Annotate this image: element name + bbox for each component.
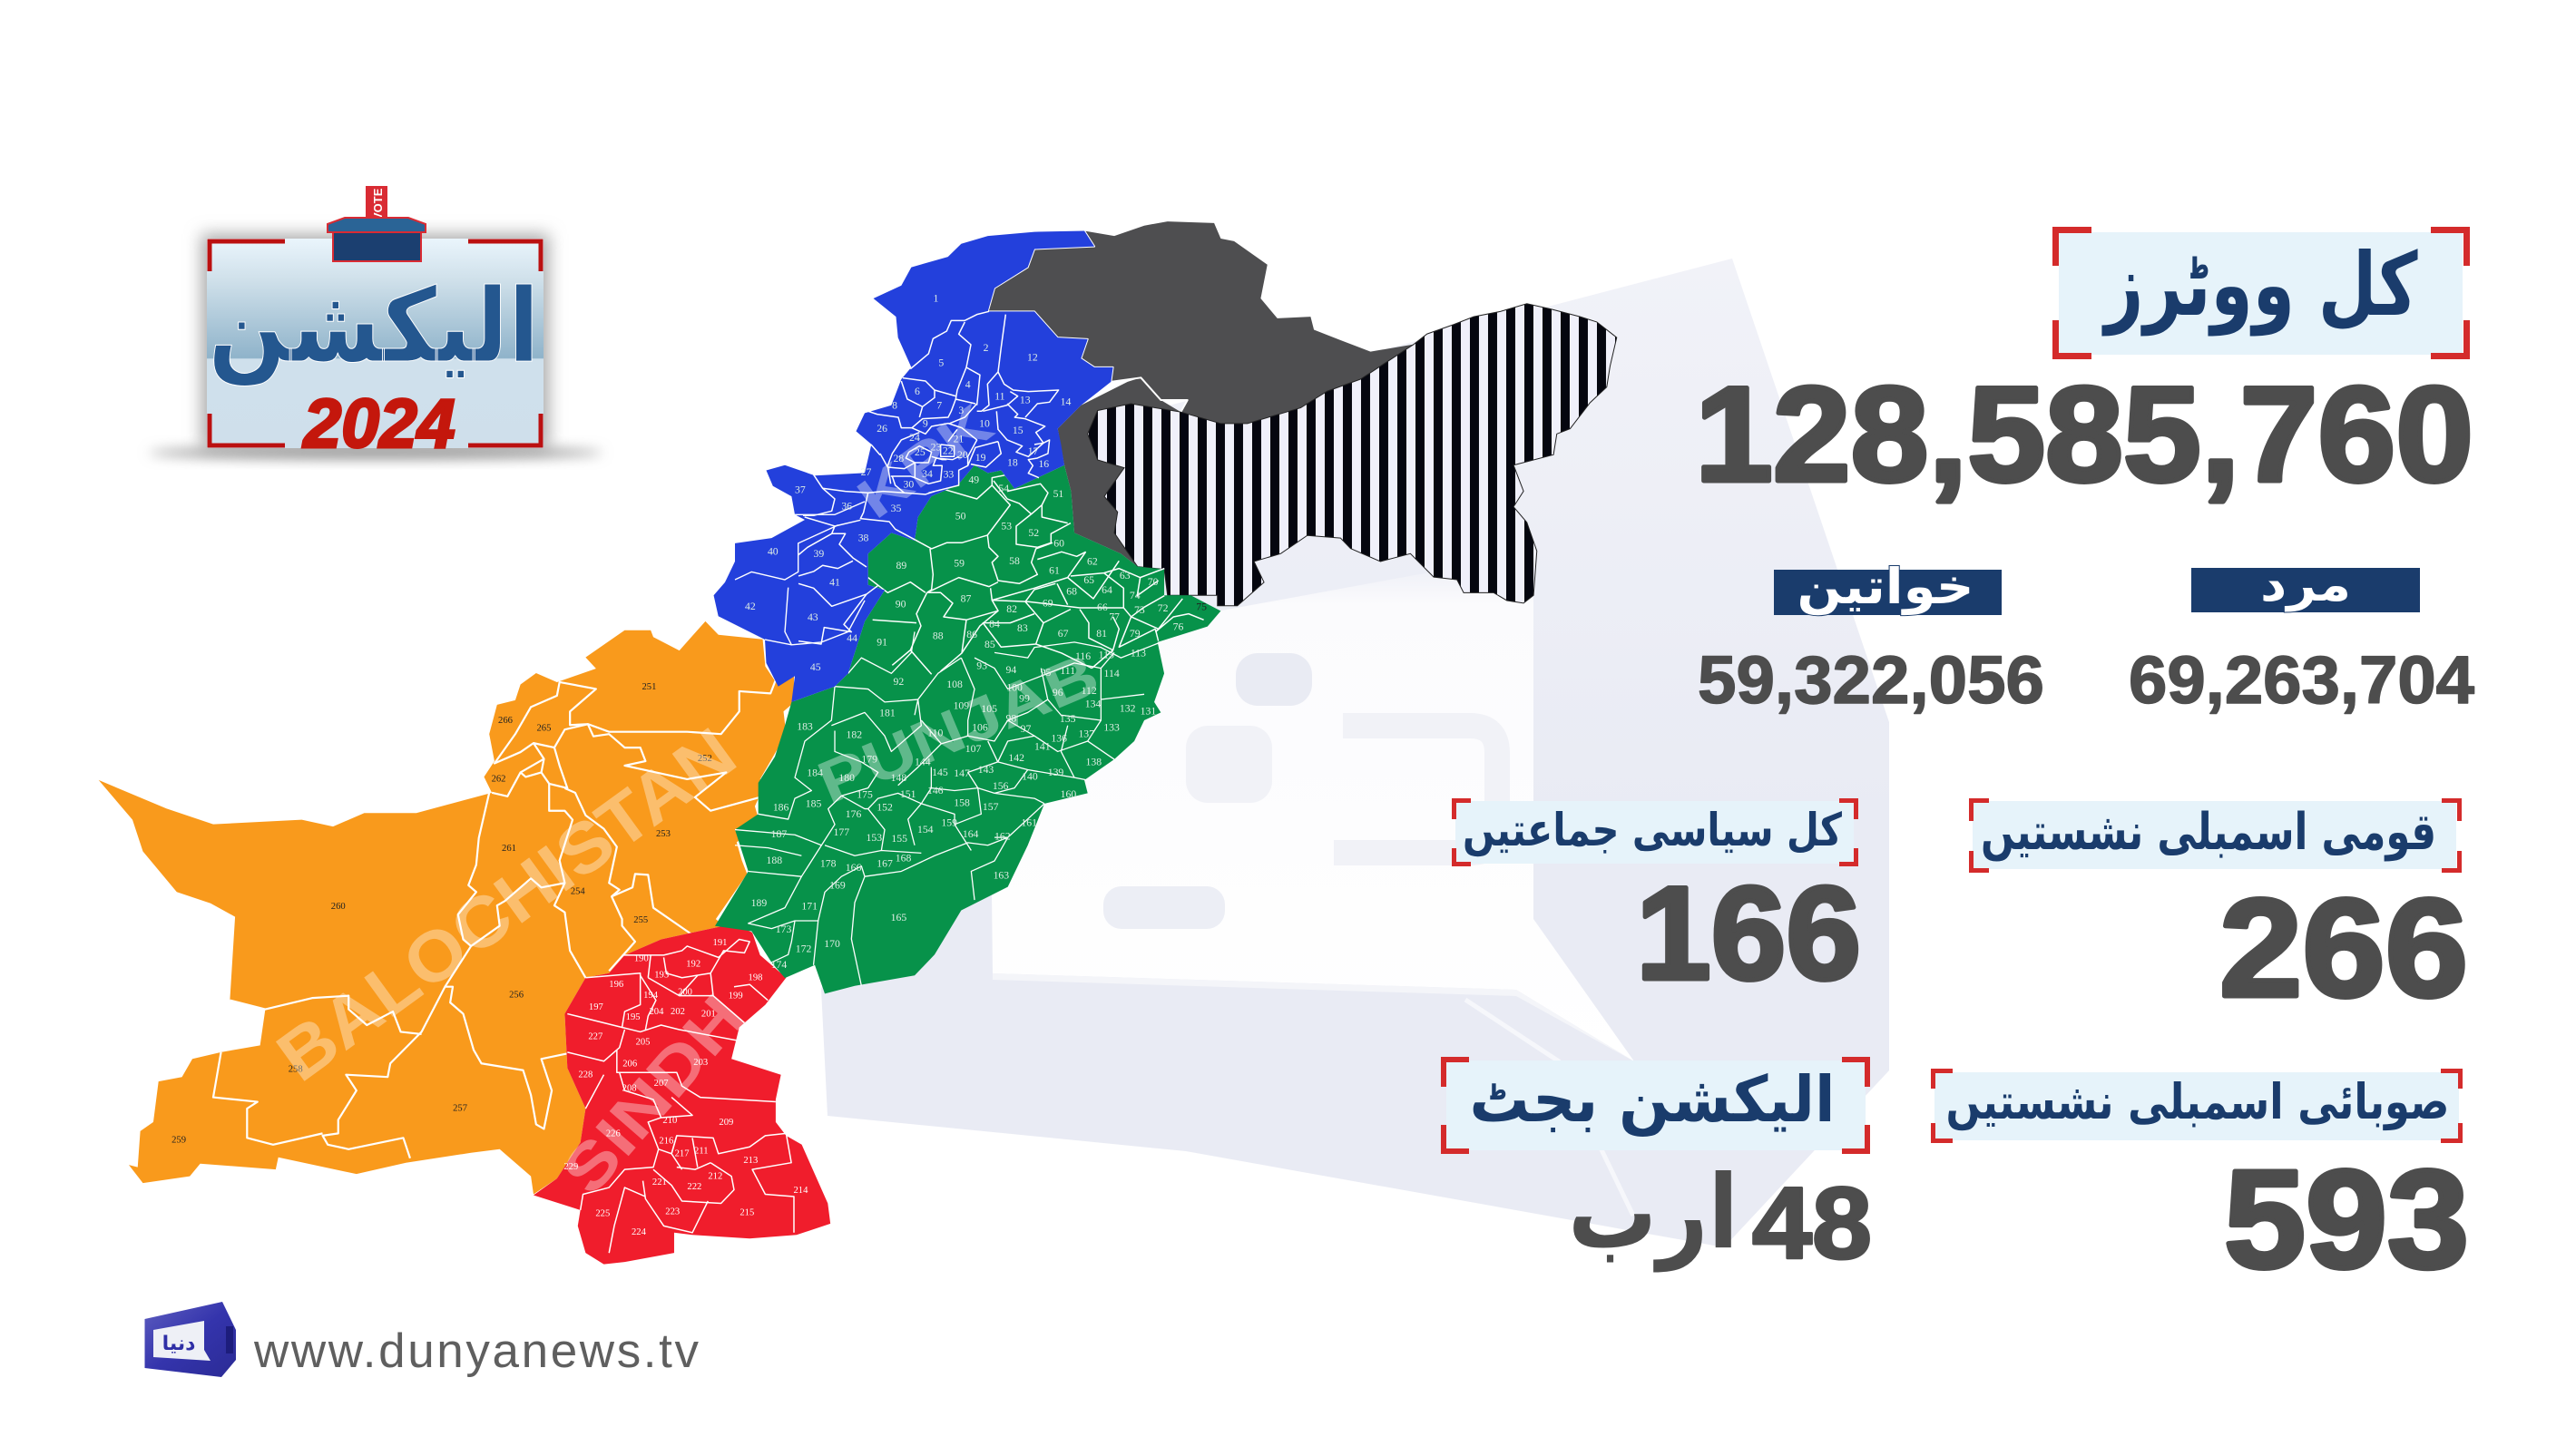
KPK constituency numbers: 7 bbox=[936, 399, 942, 411]
heading box: total voters bbox=[2056, 230, 2466, 356]
province label: KPK: KPK bbox=[847, 392, 1004, 531]
women label: خواتین bbox=[1797, 558, 1974, 615]
region: Sindh bbox=[534, 926, 830, 1265]
region: Gilgit-Baltistan and AJK bbox=[988, 221, 1414, 574]
KPK constituency numbers: 6 bbox=[915, 386, 920, 397]
map of Pakistan bbox=[99, 221, 1617, 1265]
stat: national assembly seats bbox=[1971, 800, 2468, 1026]
region: Sindh: 204 bbox=[649, 1007, 664, 1017]
Punjab constituency numbers: 170 bbox=[824, 938, 840, 950]
KPK constituency numbers: 2 bbox=[984, 342, 989, 354]
Punjab constituency numbers: 156 bbox=[993, 780, 1009, 792]
region: Sindh: 228 bbox=[578, 1070, 593, 1080]
Punjab constituency numbers: 153 bbox=[867, 832, 882, 844]
Punjab constituency numbers: 142 bbox=[1008, 752, 1024, 764]
icon: Dunya cube bbox=[145, 1302, 236, 1377]
KPK constituency numbers: 23 bbox=[931, 441, 941, 453]
Punjab constituency numbers: 59 bbox=[954, 557, 965, 569]
KPK constituency numbers: 38 bbox=[858, 533, 869, 544]
Punjab constituency numbers: 155 bbox=[891, 833, 907, 845]
region: Sindh: 199 bbox=[729, 991, 743, 1001]
logo year: 2024 bbox=[302, 386, 455, 463]
Punjab constituency numbers: 146 bbox=[927, 785, 944, 796]
Punjab constituency numbers: 86 bbox=[966, 629, 977, 640]
Punjab constituency numbers: 54 bbox=[998, 483, 1009, 494]
background watermark: Dunya logo bbox=[821, 259, 1889, 1247]
KPK constituency numbers: 35 bbox=[891, 503, 901, 514]
Punjab constituency numbers: 96 bbox=[1053, 687, 1063, 699]
Punjab constituency numbers: 76 bbox=[1173, 621, 1183, 632]
KPK constituency numbers: 15 bbox=[1013, 425, 1024, 436]
Punjab constituency numbers: 63 bbox=[1120, 570, 1131, 581]
Punjab constituency numbers: 180 bbox=[838, 772, 855, 784]
region: Balochistan: 261 bbox=[502, 844, 516, 854]
Punjab constituency numbers: 131 bbox=[1141, 705, 1156, 717]
region: Sindh: 203 bbox=[693, 1058, 708, 1068]
Punjab constituency numbers: 99 bbox=[1019, 693, 1030, 705]
stat: election budget: الیکشن بجٹ bbox=[1470, 1062, 1835, 1137]
Punjab constituency numbers: 173 bbox=[776, 923, 791, 935]
Punjab constituency numbers: 81 bbox=[1096, 628, 1107, 640]
logo heading: الیکشن bbox=[209, 268, 539, 386]
Punjab constituency numbers: 116 bbox=[1075, 650, 1091, 662]
Punjab constituency numbers: 158 bbox=[954, 796, 970, 808]
Punjab constituency numbers: 109 bbox=[954, 700, 969, 712]
KPK constituency numbers: 16 bbox=[1038, 458, 1049, 470]
Punjab constituency numbers: 160 bbox=[1061, 788, 1076, 800]
Punjab constituency numbers: 95 bbox=[1041, 667, 1052, 679]
Punjab constituency numbers: 175 bbox=[857, 789, 873, 801]
KPK constituency numbers: 34 bbox=[922, 468, 933, 480]
Punjab constituency numbers: 152 bbox=[877, 801, 893, 813]
Punjab constituency numbers: 147 bbox=[954, 767, 970, 779]
Punjab constituency numbers: 74 bbox=[1130, 590, 1141, 601]
region: Sindh: 221 bbox=[652, 1178, 667, 1187]
KPK constituency numbers: 19 bbox=[975, 452, 986, 464]
Punjab constituency numbers: 186 bbox=[773, 801, 789, 813]
Punjab constituency numbers: 154 bbox=[917, 824, 934, 835]
Punjab constituency numbers: 111 bbox=[1060, 665, 1075, 677]
region: Balochistan: 265 bbox=[537, 724, 551, 734]
Punjab constituency numbers: 64 bbox=[1102, 584, 1112, 596]
Punjab constituency numbers: 177 bbox=[834, 826, 849, 838]
region: Balochistan: 255 bbox=[633, 915, 648, 925]
Punjab constituency numbers: 113 bbox=[1131, 648, 1146, 660]
website url: www.dunyanews.tv bbox=[253, 1324, 699, 1378]
budget unit: ارب bbox=[1568, 1154, 1739, 1272]
region: Balochistan: 258 bbox=[289, 1065, 303, 1075]
KPK constituency numbers: 37 bbox=[795, 484, 806, 495]
Punjab constituency numbers: 145 bbox=[932, 767, 948, 778]
KPK constituency numbers: 41 bbox=[829, 577, 840, 589]
Punjab constituency numbers: 144 bbox=[915, 757, 931, 768]
region: Balochistan: 266 bbox=[498, 716, 513, 726]
region: Sindh: 191 bbox=[713, 938, 727, 948]
Punjab constituency numbers: 164 bbox=[963, 828, 979, 840]
Punjab constituency numbers: 91 bbox=[877, 637, 887, 649]
national assembly number: 266 bbox=[2219, 870, 2468, 1026]
KPK constituency numbers: 9 bbox=[923, 417, 928, 429]
region: Sindh: 198 bbox=[749, 973, 762, 983]
region: Balochistan: 257 bbox=[453, 1103, 467, 1113]
region: Punjab bbox=[715, 465, 1220, 993]
Punjab constituency numbers: 69 bbox=[1043, 597, 1053, 609]
Punjab constituency numbers: 83 bbox=[1017, 622, 1028, 634]
region: Sindh: 202 bbox=[671, 1007, 685, 1017]
footer: Dunya logo and website bbox=[145, 1302, 699, 1378]
Punjab constituency numbers: 87 bbox=[961, 592, 971, 604]
stat: political parties bbox=[1454, 800, 1861, 1007]
Punjab constituency numbers: 184 bbox=[807, 767, 823, 779]
Punjab constituency numbers: 132 bbox=[1120, 702, 1136, 714]
KPK constituency numbers: 40 bbox=[768, 546, 779, 558]
region: Sindh: 217 bbox=[675, 1149, 690, 1159]
KPK constituency numbers: 28 bbox=[894, 453, 904, 464]
Punjab constituency numbers: 82 bbox=[1006, 603, 1017, 615]
stat: political parties: کل سیاسی جماعتیں bbox=[1463, 804, 1843, 857]
region: Sindh: 213 bbox=[743, 1156, 758, 1166]
Punjab south district lines bbox=[735, 631, 1161, 986]
Punjab constituency numbers: 53 bbox=[1001, 521, 1012, 533]
Punjab constituency numbers: 141 bbox=[1034, 740, 1051, 752]
province label: Sindh: SINDH bbox=[548, 981, 759, 1207]
region: Sindh: 216 bbox=[659, 1137, 673, 1147]
Punjab constituency numbers: 75 bbox=[1196, 601, 1207, 612]
region: Balochistan: 259 bbox=[171, 1136, 186, 1146]
KPK constituency numbers: 36 bbox=[841, 501, 852, 513]
region: Sindh: 223 bbox=[665, 1207, 680, 1217]
region: Sindh: 206 bbox=[622, 1060, 637, 1070]
region: Sindh: 215 bbox=[739, 1208, 754, 1218]
Punjab constituency numbers: 88 bbox=[933, 630, 944, 642]
region: Sindh: 225 bbox=[595, 1209, 610, 1219]
Punjab constituency numbers: 60 bbox=[1053, 537, 1064, 549]
KPK constituency numbers: 22 bbox=[943, 445, 954, 456]
KPK constituency numbers bbox=[745, 293, 1072, 673]
KPK constituency numbers: 24 bbox=[909, 432, 920, 444]
Punjab constituency numbers: 114 bbox=[1104, 668, 1120, 679]
Punjab constituency numbers: 85 bbox=[984, 639, 995, 650]
total voters panel bbox=[1695, 230, 2474, 718]
men label: مرد bbox=[2260, 558, 2351, 612]
Punjab constituency numbers: 183 bbox=[797, 721, 813, 733]
Punjab constituency numbers: 188 bbox=[766, 855, 782, 866]
KPK constituency numbers: 33 bbox=[944, 469, 954, 481]
region: Sindh: 222 bbox=[687, 1182, 701, 1192]
Punjab constituency numbers: 89 bbox=[896, 560, 906, 572]
region: Sindh: 195 bbox=[626, 1012, 641, 1022]
Punjab constituency numbers: 169 bbox=[829, 880, 846, 892]
Punjab constituency numbers: 70 bbox=[1148, 576, 1159, 588]
Punjab constituency numbers: 94 bbox=[1006, 664, 1016, 676]
region: Sindh: 224 bbox=[632, 1227, 647, 1237]
Punjab constituency numbers: 166 bbox=[846, 862, 861, 874]
KPK constituency numbers: 5 bbox=[938, 357, 944, 368]
KPK constituency numbers: 45 bbox=[810, 661, 821, 673]
KPK constituency numbers: 18 bbox=[1007, 457, 1018, 469]
election 2024 logo bbox=[149, 186, 602, 463]
KPK constituency numbers: 43 bbox=[808, 611, 818, 623]
region: Balochistan: 252 bbox=[698, 754, 712, 764]
Punjab constituency numbers: 179 bbox=[861, 754, 877, 766]
region: Balochistan: 254 bbox=[571, 887, 585, 897]
KPK constituency numbers: 26 bbox=[877, 423, 887, 435]
KPK constituency numbers: 12 bbox=[1027, 352, 1038, 364]
region: Sindh: 190 bbox=[634, 954, 649, 964]
Punjab constituency numbers: 108 bbox=[946, 679, 963, 690]
KPK constituency numbers: 17 bbox=[1028, 445, 1039, 457]
Punjab constituency numbers: 157 bbox=[983, 801, 999, 813]
Punjab constituency numbers: 143 bbox=[978, 764, 994, 776]
Punjab constituency numbers: 133 bbox=[1103, 722, 1120, 734]
Punjab constituency numbers: 138 bbox=[1086, 757, 1102, 768]
Punjab constituency numbers: 140 bbox=[1022, 771, 1038, 783]
budget number: 48 bbox=[1752, 1167, 1872, 1280]
Punjab constituency numbers: 106 bbox=[972, 722, 988, 734]
region: Sindh: 200 bbox=[678, 988, 692, 998]
Punjab constituency numbers: 174 bbox=[771, 959, 787, 971]
Punjab constituency numbers: 107 bbox=[965, 743, 981, 755]
Punjab constituency numbers: 148 bbox=[891, 772, 906, 784]
KPK constituency numbers: 44 bbox=[847, 632, 857, 644]
region: Sindh: 207 bbox=[654, 1079, 669, 1089]
region: Sindh: 208 bbox=[622, 1083, 637, 1093]
Punjab constituency numbers: 182 bbox=[847, 729, 862, 741]
KPK constituency numbers: 39 bbox=[814, 548, 824, 560]
region: Sindh: 193 bbox=[654, 971, 669, 981]
parties number: 166 bbox=[1636, 859, 1861, 1007]
KPK constituency numbers: 3 bbox=[958, 405, 964, 416]
region: Sindh: 201 bbox=[701, 1009, 716, 1019]
KPK constituency numbers: 27 bbox=[861, 466, 871, 478]
Punjab constituency numbers: 90 bbox=[896, 599, 906, 611]
region: Balochistan bbox=[99, 621, 794, 1195]
Punjab constituency numbers: 73 bbox=[1134, 604, 1145, 616]
region: KPK bbox=[714, 230, 1113, 702]
Punjab constituency numbers: 112 bbox=[1082, 685, 1097, 697]
Punjab constituency numbers: 165 bbox=[891, 912, 906, 923]
Punjab constituency numbers: 68 bbox=[1066, 585, 1077, 597]
province label: Punjab: PUNJAB bbox=[808, 640, 1108, 816]
region: Balochistan: 253 bbox=[656, 829, 671, 839]
Punjab constituency numbers: 176 bbox=[846, 808, 861, 820]
Punjab constituency numbers: 84 bbox=[989, 618, 1000, 630]
men number: 69,263,704 bbox=[2129, 642, 2474, 718]
KPK district lines bbox=[798, 311, 1059, 644]
region: Sindh: 197 bbox=[589, 1002, 603, 1012]
stat: provincial assembly seats bbox=[1933, 1070, 2469, 1297]
Punjab constituency numbers: 77 bbox=[1109, 611, 1120, 622]
Punjab constituency numbers: 167 bbox=[877, 857, 893, 869]
province label: Balochistan: BALOCHISTAN bbox=[262, 712, 749, 1097]
region: Sindh: 226 bbox=[606, 1129, 621, 1139]
KPK constituency numbers: 13 bbox=[1020, 395, 1031, 406]
region: Sindh: 194 bbox=[643, 991, 659, 1001]
Punjab constituency numbers: 97 bbox=[1021, 723, 1032, 735]
Punjab constituency numbers: 115 bbox=[1099, 649, 1114, 660]
region: Sindh: 192 bbox=[686, 960, 700, 970]
region: Balochistan: 251 bbox=[642, 682, 656, 692]
Punjab constituency numbers: 187 bbox=[771, 828, 787, 840]
Punjab constituency numbers: 189 bbox=[751, 897, 767, 909]
Punjab constituency numbers: 161 bbox=[1021, 817, 1037, 829]
heading box: total voters: کل ووٹرز bbox=[2101, 234, 2418, 337]
Punjab constituency numbers: 52 bbox=[1028, 527, 1039, 539]
KPK constituency numbers: 10 bbox=[979, 417, 990, 429]
region: Sindh: 196 bbox=[609, 980, 623, 990]
KPK fill bbox=[714, 230, 1113, 702]
Punjab constituency numbers: 136 bbox=[1051, 733, 1067, 745]
stat: national assembly seats: قومی اسمبلی نشستیں bbox=[1981, 803, 2436, 862]
Punjab constituency numbers: 92 bbox=[894, 676, 904, 688]
Punjab constituency numbers: 162 bbox=[994, 831, 1011, 843]
Punjab constituency numbers: 65 bbox=[1083, 574, 1094, 586]
region: Balochistan: 256 bbox=[509, 990, 524, 1000]
Punjab constituency numbers bbox=[751, 474, 1207, 971]
Punjab constituency numbers: 62 bbox=[1087, 556, 1098, 568]
KPK constituency numbers: 1 bbox=[934, 293, 939, 305]
region: Sindh: 214 bbox=[793, 1186, 808, 1196]
region: Balochistan: 262 bbox=[492, 775, 505, 785]
KPK constituency numbers: 30 bbox=[904, 479, 914, 491]
Punjab constituency numbers: 137 bbox=[1078, 728, 1094, 740]
Punjab north district lines bbox=[868, 469, 1204, 674]
provincial assembly number: 593 bbox=[2224, 1141, 2469, 1297]
total voters number: 128,585,760 bbox=[1695, 358, 2473, 510]
KPK constituency numbers: 8 bbox=[892, 399, 897, 411]
icon: Dunya cube: دنیا bbox=[162, 1333, 195, 1355]
Punjab constituency numbers: 134 bbox=[1085, 698, 1102, 709]
Punjab constituency numbers: 159 bbox=[941, 817, 957, 829]
region: Sindh: 211 bbox=[694, 1147, 709, 1157]
Punjab constituency numbers: 178 bbox=[820, 857, 837, 869]
KPK western district lines bbox=[735, 502, 865, 645]
women number: 59,322,056 bbox=[1698, 642, 2044, 718]
KPK constituency numbers: 11 bbox=[994, 391, 1005, 403]
Punjab constituency numbers: 185 bbox=[806, 797, 821, 809]
Punjab constituency numbers: 172 bbox=[796, 943, 811, 955]
region: Sindh: 227 bbox=[588, 1032, 602, 1042]
KPK constituency numbers: 14 bbox=[1061, 396, 1072, 407]
icon: ballot box bbox=[328, 186, 426, 261]
KPK constituency numbers: 21 bbox=[954, 434, 964, 445]
Punjab constituency numbers: 139 bbox=[1048, 767, 1063, 778]
KPK constituency numbers: 25 bbox=[915, 446, 926, 458]
stat: provincial assembly seats: صوبائی اسمبلی نشستیں bbox=[1945, 1073, 2450, 1130]
region: Sindh: 210 bbox=[662, 1116, 677, 1126]
logo shadows bbox=[149, 234, 602, 459]
Punjab constituency numbers: 49 bbox=[968, 474, 979, 485]
Punjab constituency numbers: 171 bbox=[801, 901, 818, 913]
Punjab constituency numbers: 105 bbox=[981, 703, 997, 715]
icon: ballot box: VOTE bbox=[371, 188, 385, 220]
KPK constituency numbers: 4 bbox=[965, 378, 971, 390]
Punjab constituency numbers: 181 bbox=[879, 708, 896, 719]
region: Sindh: 229 bbox=[563, 1162, 578, 1172]
men label bbox=[2191, 558, 2420, 612]
region: Kashmir striped bbox=[1088, 304, 1617, 606]
Punjab constituency numbers: 93 bbox=[976, 660, 987, 671]
Punjab constituency numbers: 135 bbox=[1060, 713, 1076, 725]
region: Balochistan: 260 bbox=[331, 902, 346, 912]
region: Sindh: 212 bbox=[708, 1171, 722, 1181]
Punjab constituency numbers: 72 bbox=[1158, 602, 1169, 614]
Punjab constituency numbers: 50 bbox=[955, 511, 966, 523]
Punjab constituency numbers: 100 bbox=[1006, 681, 1023, 693]
Punjab constituency numbers: 58 bbox=[1009, 555, 1020, 567]
Punjab constituency numbers: 67 bbox=[1058, 628, 1069, 640]
Punjab constituency numbers: 168 bbox=[896, 853, 911, 865]
region: Sindh: 205 bbox=[636, 1038, 650, 1048]
Punjab constituency numbers: 51 bbox=[1053, 488, 1063, 500]
Punjab constituency numbers: 163 bbox=[994, 870, 1009, 882]
Punjab fill bbox=[715, 465, 1220, 993]
Punjab constituency numbers: 151 bbox=[900, 788, 916, 800]
KPK constituency numbers: 42 bbox=[745, 601, 756, 612]
stat: election budget bbox=[1444, 1060, 1872, 1280]
Punjab constituency numbers: 98 bbox=[1006, 712, 1016, 724]
region: Sindh: 209 bbox=[719, 1118, 733, 1128]
Punjab constituency numbers: 66 bbox=[1097, 601, 1108, 613]
Punjab constituency numbers: 61 bbox=[1049, 564, 1060, 576]
Punjab constituency numbers: 79 bbox=[1130, 628, 1141, 640]
KPK constituency numbers: 20 bbox=[957, 449, 968, 461]
Punjab constituency numbers: 110 bbox=[927, 727, 943, 738]
logo card bbox=[207, 239, 544, 448]
